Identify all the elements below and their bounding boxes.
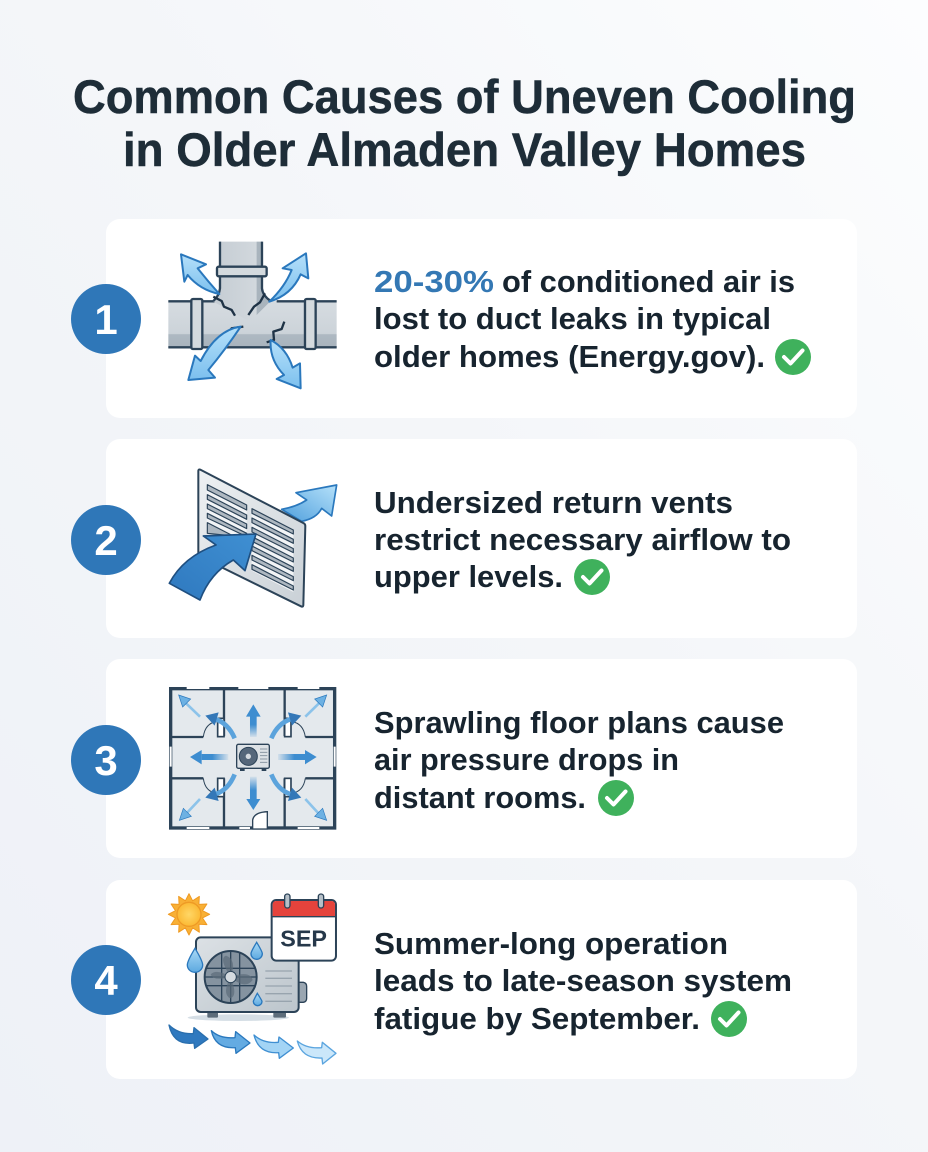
panel: cause 4 system fatigue <box>71 880 857 1079</box>
text: cause 3: distant rooms. <box>374 780 586 815</box>
number badge 4 <box>71 945 141 1015</box>
title: Common Causes of Uneven Cooling <box>73 70 856 123</box>
number badge 3: 3 <box>94 737 118 784</box>
title <box>73 70 856 176</box>
icon: September calendar: SEP <box>280 926 327 952</box>
icon: green check 1 <box>775 339 811 375</box>
text: cause 1: older homes (Energy.gov). <box>374 339 765 374</box>
icon: September calendar <box>272 894 336 961</box>
text: cause 1: lost to duct leaks in typical <box>374 301 771 336</box>
icon: green check 2 <box>574 559 610 595</box>
number badge 2: 2 <box>94 517 118 564</box>
panel: cause 2 return vents <box>71 439 857 638</box>
text: cause 1: of conditioned air is <box>502 264 795 299</box>
icon: leaking duct pipe <box>168 242 337 388</box>
icon: worn outdoor unit with sun and calendar <box>168 894 336 1064</box>
text: cause 2: restrict necessary airflow to <box>374 522 791 557</box>
icon: green check 4 <box>711 1001 747 1037</box>
text: cause 4: Summer-long operation <box>374 926 728 961</box>
card 2 background <box>106 439 857 638</box>
text: cause 1 <box>374 264 795 374</box>
text: cause 4: fatigue by September. <box>374 1001 700 1036</box>
icon: sun <box>168 894 210 935</box>
icon: weakening airflow arrows <box>169 1025 336 1064</box>
text: cause 1: 20-30% <box>374 264 494 299</box>
icon: green check 3 <box>598 780 634 816</box>
card 4 background <box>106 880 857 1079</box>
text: cause 3: Sprawling floor plans cause <box>374 705 784 740</box>
text: cause 4: leads to late-season system <box>374 963 792 998</box>
number badge 2 <box>71 505 141 575</box>
text: cause 2 <box>374 485 791 594</box>
text: cause 3 <box>374 705 784 815</box>
text: cause 3: air pressure drops in <box>374 742 679 777</box>
panel: cause 1 duct leaks <box>71 219 857 418</box>
number badge 3 <box>71 725 141 795</box>
text: cause 2: upper levels. <box>374 559 563 594</box>
title: in Older Almaden Valley Homes <box>123 123 806 176</box>
number badge 1 <box>71 284 141 354</box>
text: cause 4 <box>374 926 792 1036</box>
icon: undersized return vent <box>169 469 337 607</box>
panel: cause 3 floor plan <box>71 659 857 858</box>
number badge 4: 4 <box>94 957 118 1004</box>
card 1 background <box>106 219 857 418</box>
text: cause 2: Undersized return vents <box>374 485 733 520</box>
icon: water drops <box>187 942 262 1006</box>
card 3 background <box>106 659 857 858</box>
number badge 1: 1 <box>94 296 118 343</box>
icon: floor plan airflow <box>171 688 335 829</box>
